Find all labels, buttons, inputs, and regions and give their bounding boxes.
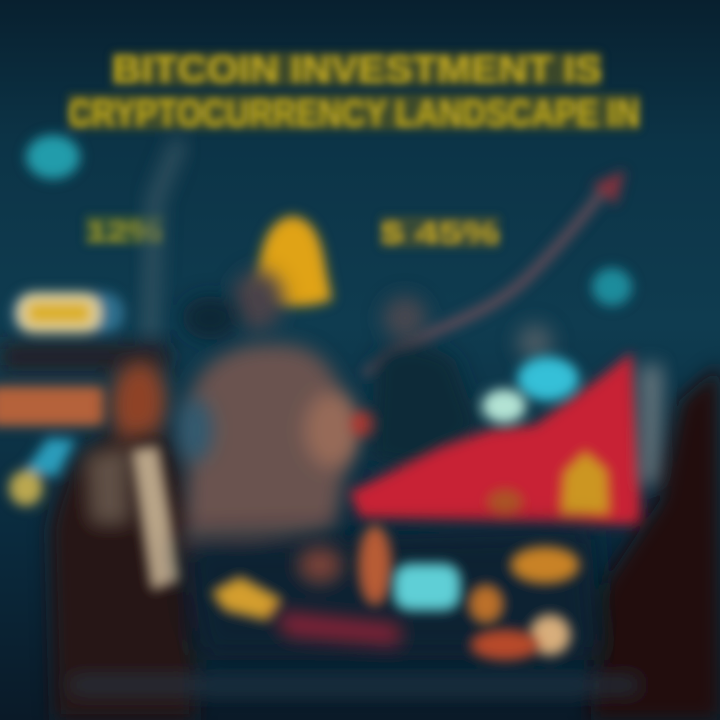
thin pole left xyxy=(150,140,180,340)
title: BITCOIN INVESTMENT IS xyxy=(112,49,602,91)
icon: teal bubble top left xyxy=(26,135,80,179)
footer band xyxy=(70,674,640,696)
card: cyan xyxy=(394,564,460,610)
stat label right xyxy=(380,216,500,250)
dark band left xyxy=(0,343,170,371)
stat label left: 12% xyxy=(86,216,162,247)
card: orange lower xyxy=(469,585,503,623)
icon: cyan and yellow tags left xyxy=(9,438,76,506)
card: cream xyxy=(530,615,570,655)
bottom item cards xyxy=(212,525,579,660)
title: CRYPTOCURRENCY LANDSCAPE IN xyxy=(68,93,640,135)
arrow: rising trend curve xyxy=(365,170,625,375)
bar: orange small xyxy=(487,489,523,515)
callout: orange band left xyxy=(0,386,104,426)
chart edge highlight xyxy=(640,365,662,485)
figure: dark right silhouette xyxy=(590,365,720,720)
icon: yellow bell xyxy=(250,216,332,306)
figure: left person xyxy=(50,362,195,720)
figure: dark person xyxy=(182,296,553,470)
card: orange upper right xyxy=(511,547,579,583)
bottom shadow area xyxy=(180,530,600,660)
card: orange left xyxy=(212,577,282,620)
callout: yellow pill left xyxy=(12,292,124,334)
bar: yellow tall xyxy=(560,450,610,515)
title xyxy=(68,49,640,135)
card: orange center xyxy=(359,525,391,605)
figure: center person xyxy=(177,270,379,555)
stat label left xyxy=(85,215,163,247)
chart: red area chart xyxy=(350,352,662,525)
callout: pale bubble xyxy=(482,389,526,423)
callout: cyan bubble xyxy=(517,357,579,401)
card: red bottom xyxy=(471,630,539,660)
stat label right: $ 45% xyxy=(380,217,500,250)
icon: teal bubble right xyxy=(592,268,632,306)
card: red strip xyxy=(275,612,400,645)
